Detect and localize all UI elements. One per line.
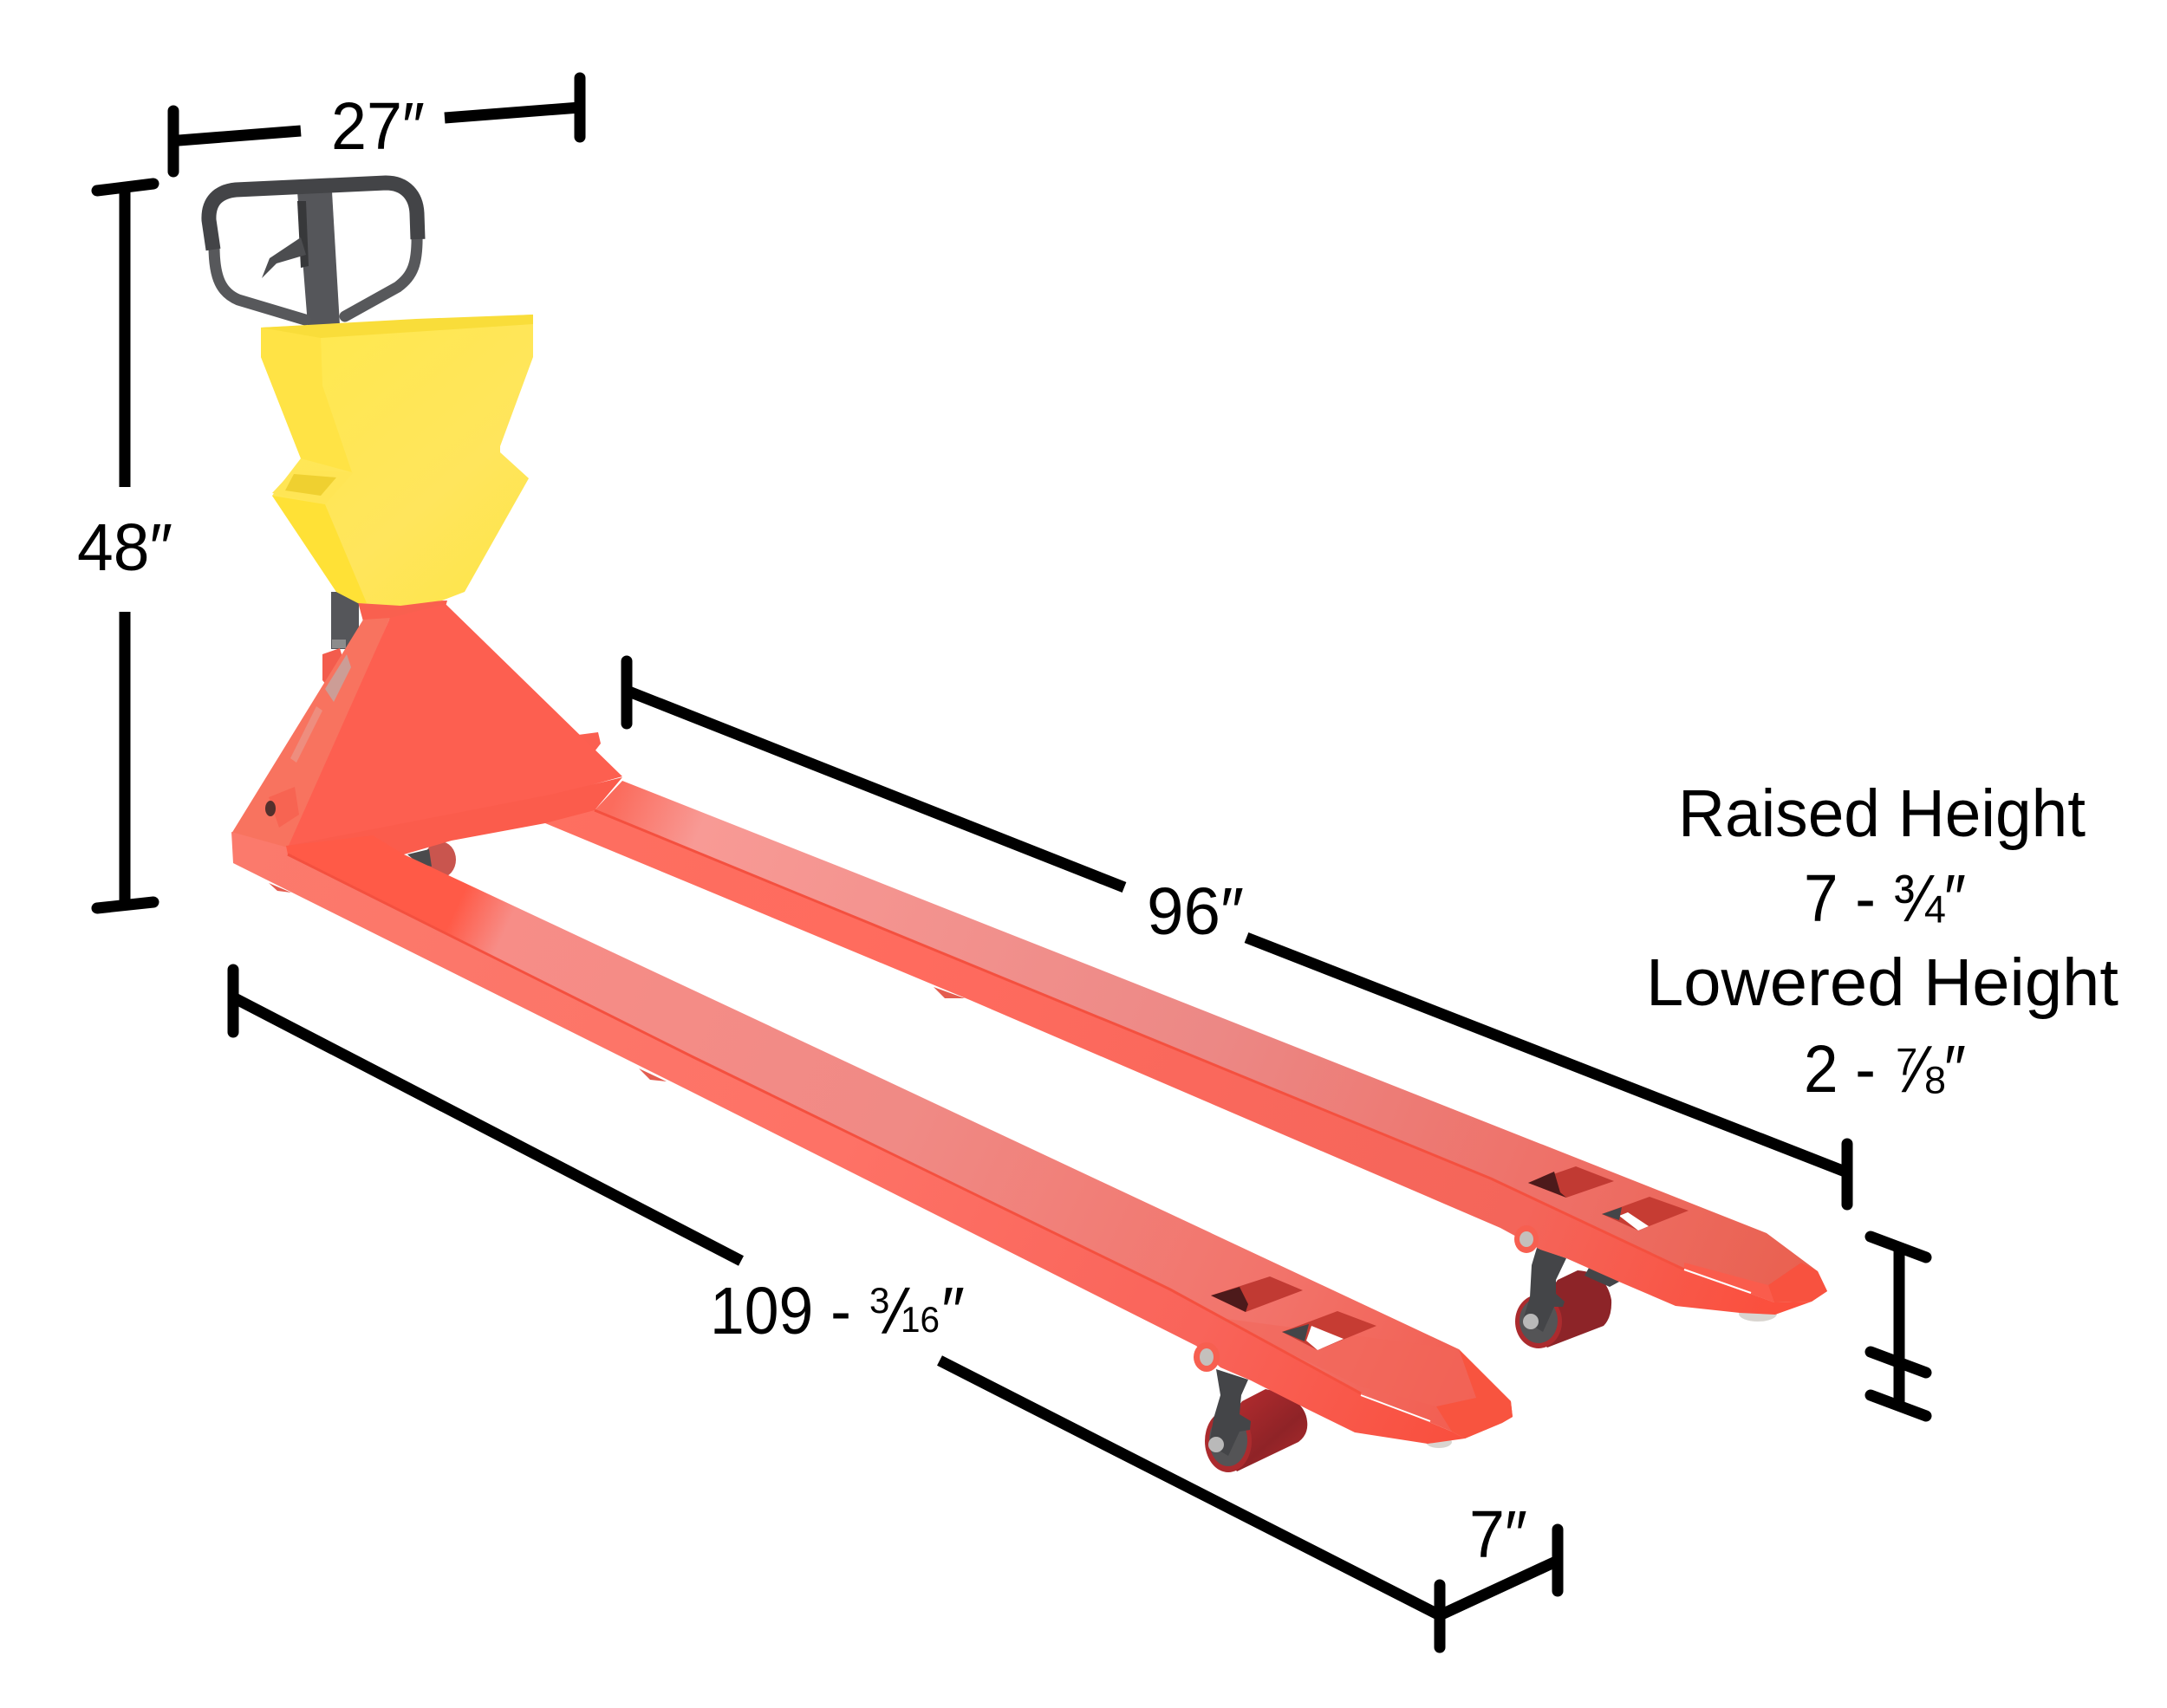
label 109 3/16 inch: 16 [901,1299,940,1340]
label 109 3/16 inch [710,1274,965,1348]
front fork caster [1426,1436,1452,1448]
yellow weigh-scale housing [261,315,533,606]
text block: raised and lowered heights [1646,776,2118,1107]
text block: raised and lowered heights: Lowered Height [1646,945,2118,1020]
release lever [262,237,306,278]
pallet truck [209,183,1827,1472]
dimension: 48 inch overall height [77,184,172,908]
rear wheel behind the frame [407,841,456,878]
tip bevel [1768,1263,1827,1302]
left face lower [272,496,367,603]
fork underside tab [934,987,965,998]
right peg [578,732,601,755]
axle [1523,1314,1539,1329]
roller [1526,1270,1611,1348]
left face upper [261,328,352,472]
pocket [272,470,354,504]
top rim [261,315,533,338]
text block: raised and lowered heights: 2 - ⅞″ [1804,1032,1966,1107]
label 48 inch: 48″ [77,510,172,585]
highlight [1684,1270,1751,1293]
fork hole 2 [1282,1311,1376,1350]
frame [231,601,622,858]
main triangle face [288,604,622,848]
dimension: 96 inch fork length [627,661,1847,1205]
handle [209,183,418,325]
bracket [1523,1248,1566,1332]
hydraulic column [322,592,359,691]
label 27 inch: 27″ [331,89,425,164]
red top cap under the housing [358,601,447,621]
ridge line [595,810,1684,1270]
decal [325,654,351,702]
label 109 3/16 inch: ″ [941,1274,965,1348]
rear fork caster [1739,1306,1777,1322]
top face [595,781,1827,1302]
ridge line [288,854,1361,1393]
fork hole 1 [1211,1276,1303,1312]
dimension: raised and lowered height bracket [1871,1237,1926,1416]
axle [1208,1437,1224,1452]
text block: raised and lowered heights: 7 - ¾″ [1804,861,1966,936]
label 109 3/16 inch: 3 [869,1280,889,1321]
handle grip [209,183,418,250]
lower frame strip [288,777,622,858]
rear fork [545,781,1827,1315]
dimension: 7 inch fork width [1440,1497,1558,1647]
side face [545,796,1812,1315]
label 109 3/16 inch: 109 - [710,1274,851,1348]
top face [286,835,1513,1438]
tip bevel [1436,1349,1513,1438]
rear fork wheel [1515,1248,1621,1348]
bracket [1209,1369,1251,1456]
side face [231,832,1465,1444]
front fork wheel [1205,1369,1307,1472]
fork hole 1 [1528,1166,1614,1198]
fork underside tab [639,1068,667,1081]
front fork [231,832,1513,1444]
label 96 inch: 96″ [1147,874,1244,949]
pivot knuckle [1514,1225,1539,1253]
lower handle bars [214,232,417,320]
housing body [261,315,533,606]
left bracket face [231,618,390,854]
highlight [1361,1395,1430,1421]
roller [1214,1389,1307,1471]
dimension: 109 3/16 inch overall length [233,970,1440,1615]
dimension: 27 inch handle width [173,78,580,172]
left bolt [265,787,299,828]
handle post [297,192,340,325]
fork hole 2 [1602,1197,1689,1231]
label 109 3/16 inch: / [878,1277,914,1347]
text block: raised and lowered heights: Raised Height [1678,776,2086,851]
label 7 inch: 7″ [1469,1497,1527,1572]
pivot knuckle [1194,1342,1220,1372]
